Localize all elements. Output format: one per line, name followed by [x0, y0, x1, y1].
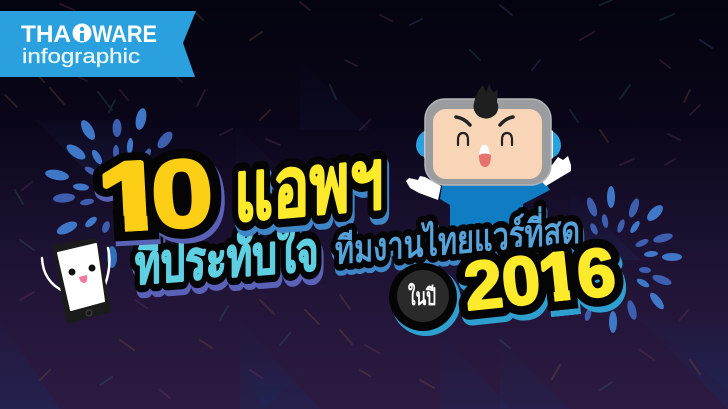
- mascot body: [440, 180, 550, 250]
- title: 10: 0: [152, 144, 219, 254]
- title: by Thaiware team: ทีมงานไทยแวร์ที่สุด: [335, 202, 580, 275]
- phone face: [68, 268, 76, 276]
- title: by Thaiware team: ทีมงานไทยแวร์ที่สุด: [336, 207, 581, 280]
- mascot headphones: [416, 129, 431, 159]
- title: impressive: ที่ประทับใจ: [135, 212, 318, 296]
- title: 2016: [461, 233, 622, 331]
- title: 2016: 1: [538, 243, 584, 323]
- title: apps: แอพฯ: [234, 132, 383, 239]
- title: 2016: 6: [576, 239, 622, 319]
- title: 2016: 1: [536, 237, 581, 317]
- title: impressive: [135, 212, 320, 302]
- title: apps: แอพฯ: [236, 138, 385, 245]
- badge: in year: ในปี: [408, 282, 436, 311]
- phone arms: [42, 258, 65, 292]
- fireworks right: [584, 186, 682, 333]
- logo wordmark: WARE: [92, 21, 157, 48]
- title: impressive: ที่ประทับใจ: [135, 212, 318, 296]
- title: 10: 0: [148, 139, 216, 249]
- mascot nose and mouth: [479, 145, 490, 155]
- mascot eyes: [458, 133, 468, 145]
- title: by Thaiware team: ทีมงานไทยแวร์ที่สุด: [335, 202, 580, 275]
- mascot brows: [456, 117, 470, 125]
- title: 10: 0: [148, 139, 216, 249]
- badge: in year: [389, 263, 461, 336]
- title: 2016: 6: [573, 234, 619, 313]
- logo ribbon: [0, 11, 196, 77]
- logo subtitle: infographic: [22, 46, 140, 68]
- title: 10: 1: [97, 142, 166, 252]
- mascot helmet: [425, 99, 551, 185]
- title: apps: แอพฯ: [234, 132, 383, 239]
- logo wordmark: THA: [21, 21, 71, 48]
- mascot face: [433, 109, 542, 179]
- title: 2016: 20: [461, 241, 544, 325]
- mascot hair: [474, 84, 498, 119]
- fireworks left: [44, 107, 175, 268]
- mascot gloves: [406, 176, 441, 200]
- mascot: [406, 84, 571, 250]
- phone body: [55, 241, 109, 321]
- title: 10: 1: [97, 142, 166, 252]
- logo wordmark: [21, 21, 157, 48]
- title: 2016: 20: [461, 241, 544, 325]
- title: impressive: ที่ประทับใจ: [137, 218, 320, 302]
- title: 2016: 20: [463, 247, 546, 331]
- title: 10: 1: [98, 147, 167, 257]
- phone character: [42, 241, 109, 321]
- title: 10: [92, 148, 225, 246]
- title: 2016: 6: [573, 234, 619, 313]
- title: 2016: 1: [536, 237, 581, 317]
